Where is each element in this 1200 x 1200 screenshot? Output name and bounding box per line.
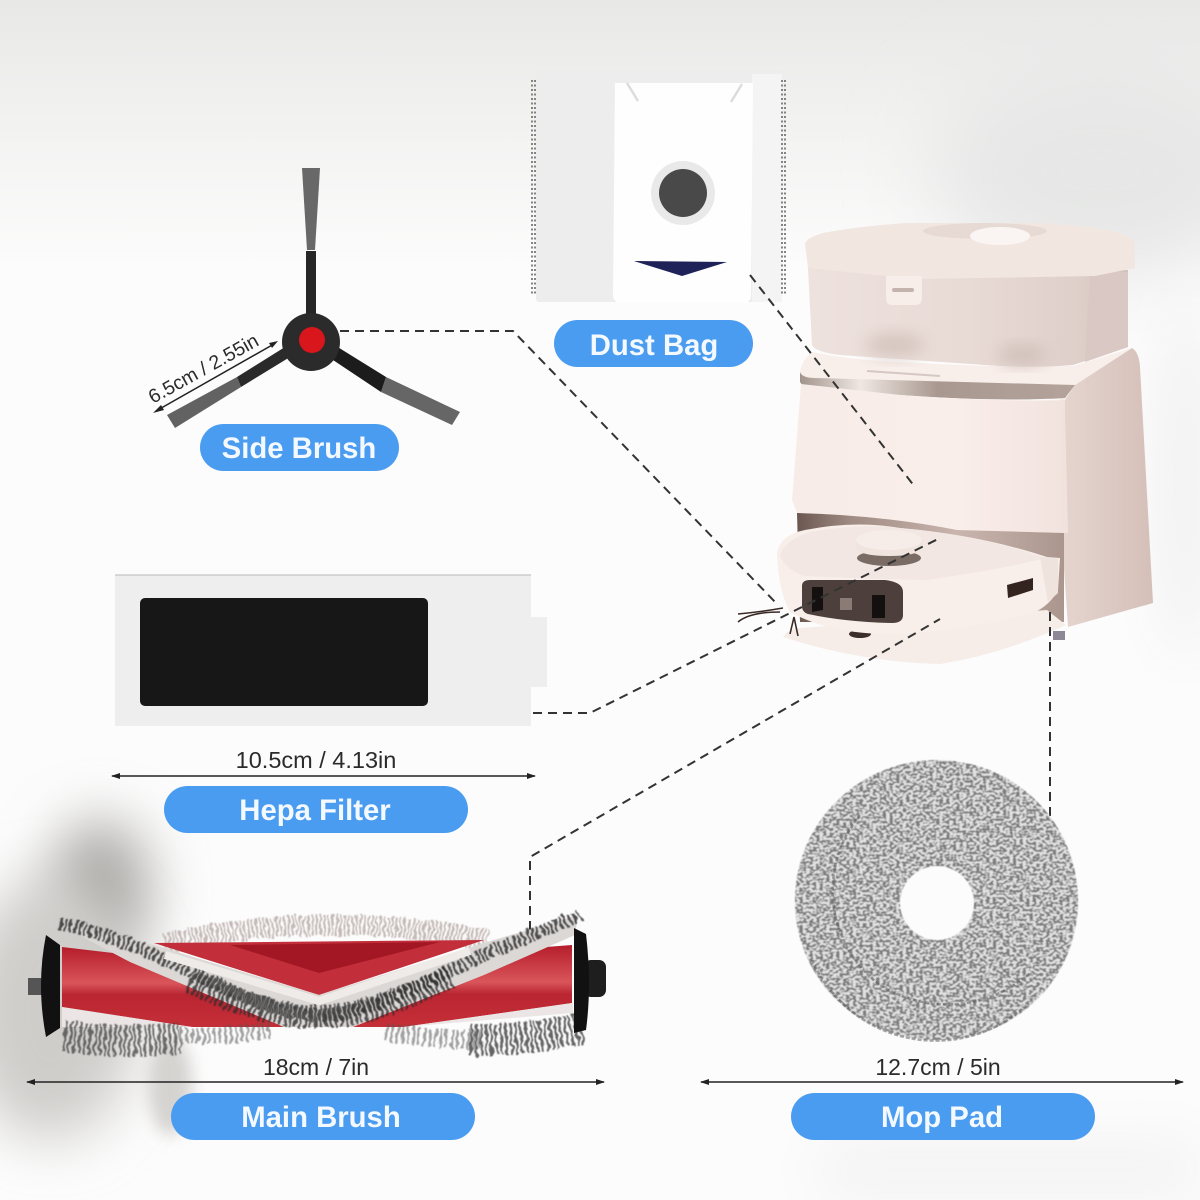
label: hepa filter [164, 786, 468, 833]
lid [805, 223, 1135, 279]
label: side brush [200, 424, 399, 471]
label: dust bag [554, 320, 753, 367]
end caps [41, 935, 60, 1037]
collar [800, 348, 1132, 400]
icon: mop pad [795, 760, 1078, 1041]
icon: side brush [167, 168, 460, 428]
cavity [797, 513, 1064, 622]
label: hepa filter: Hepa Filter [239, 794, 391, 827]
V-shaped white strip and bristles [60, 915, 578, 1027]
label: mop pad: Mop Pad [881, 1101, 1003, 1134]
label: dust bag: Dust Bag [590, 329, 718, 362]
robot body [777, 524, 1060, 634]
icon: hepa filter [115, 575, 547, 726]
icon: dust bag [532, 70, 785, 303]
dimension: main brush [26, 1054, 605, 1085]
dimension: side brush length: 6.5cm / 2.55in [145, 330, 263, 408]
side panel [1060, 348, 1153, 627]
water tank [808, 268, 1128, 367]
dock front [792, 384, 1068, 533]
dimension: mop pad [700, 1054, 1184, 1085]
charging tray [783, 610, 1066, 664]
label: main brush: Main Brush [241, 1101, 401, 1134]
label: main brush [171, 1093, 475, 1140]
dock band [800, 372, 1075, 399]
leader lines [340, 275, 1050, 945]
dimension: hepa filter: 10.5cm / 4.13in [236, 747, 396, 773]
dimension: hepa filter [111, 747, 536, 779]
label: mop pad [791, 1093, 1095, 1140]
lower bristles [64, 1036, 180, 1041]
label: side brush: Side Brush [222, 432, 376, 465]
dimension: mop pad: 12.7cm / 5in [875, 1054, 1001, 1080]
dimension: main brush: 18cm / 7in [263, 1054, 369, 1080]
icon: dock station with robot [738, 223, 1153, 664]
icon: main brush [28, 915, 606, 1041]
